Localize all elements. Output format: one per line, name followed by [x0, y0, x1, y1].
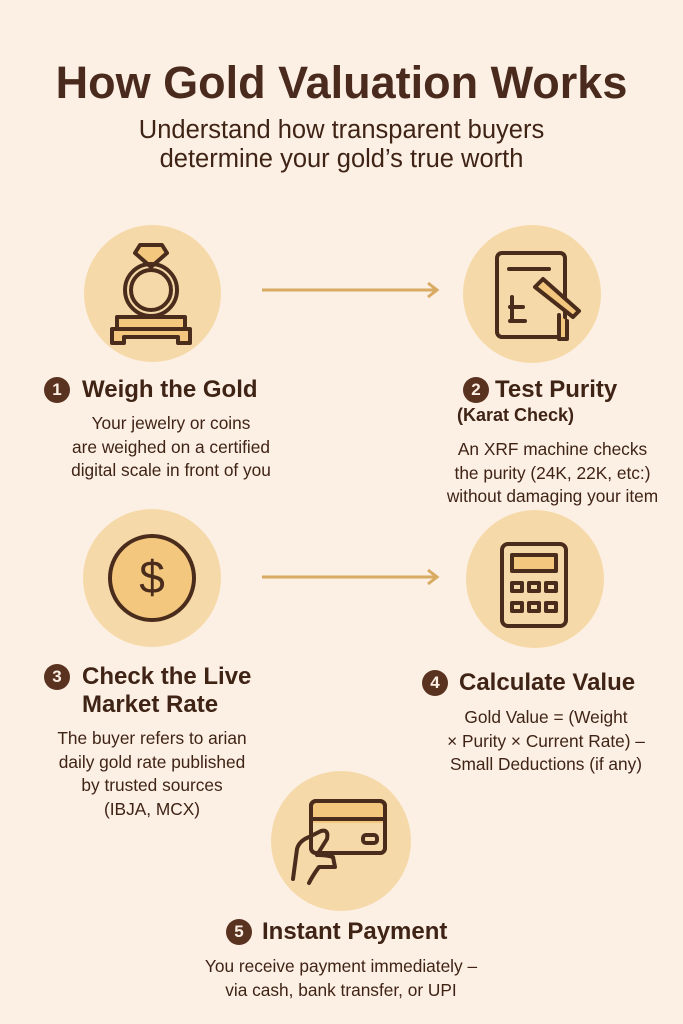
step 3 text: by trusted sources	[81, 775, 223, 795]
icon: ring on scale	[84, 225, 221, 362]
step 3 text: (IBJA, MCX)	[104, 798, 200, 818]
step 2 heading: Test Purity	[495, 376, 617, 403]
icon: dollar coin: $	[139, 551, 165, 603]
subtitle	[139, 116, 544, 173]
step 3 heading: Check the Live	[82, 663, 251, 690]
step 2 text: without damaging your item	[447, 486, 658, 506]
step 2 heading: (Karat Check)	[457, 405, 574, 425]
icon: card in hand	[271, 771, 411, 911]
step 3 heading: Market Rate	[82, 691, 218, 718]
step 1 text	[71, 413, 271, 480]
subtitle: determine your gold’s true worth	[160, 145, 523, 173]
step 2 text	[446, 439, 658, 506]
step 4 text: × Purity × Current Rate) –	[447, 730, 645, 750]
step 3 text: The buyer refers to arian	[57, 728, 247, 748]
step 1 text: Your jewelry or coins	[92, 413, 250, 433]
icon: dollar coin	[83, 509, 221, 647]
step 2 heading	[457, 376, 618, 425]
arrow 2	[262, 569, 440, 586]
step 2 text: An XRF machine checks	[458, 439, 647, 459]
step 4 text: Small Deductions (if any)	[450, 754, 642, 774]
step 4 heading: Calculate Value	[459, 669, 635, 696]
step 5 text: via cash, bank transfer, or UPI	[225, 980, 457, 1000]
step 4 heading: 4	[430, 673, 440, 692]
step 1 heading: Weigh the Gold	[82, 376, 258, 403]
step 1 heading: 1	[52, 380, 62, 399]
icon: calculator	[466, 510, 604, 648]
step 5 heading: Instant Payment	[262, 918, 447, 945]
title: How Gold Valuation Works	[56, 57, 627, 108]
step 2 heading: 2	[471, 380, 481, 399]
step 3 heading: 3	[52, 667, 62, 686]
step 1 text: digital scale in front of you	[71, 460, 271, 480]
icon: purity test	[463, 225, 601, 363]
step 5 heading: 5	[234, 922, 244, 941]
step 5 text: You receive payment immediately –	[205, 956, 477, 976]
step 3 heading	[44, 663, 251, 718]
step 3 text	[57, 728, 247, 818]
step 2 text: the purity (24K, 22K, etc:)	[455, 462, 650, 482]
arrow 1	[262, 282, 440, 298]
step 3 text: daily gold rate published	[59, 752, 245, 772]
subtitle: Understand how transparent buyers	[139, 116, 544, 144]
step 5 text	[205, 956, 478, 1000]
step 4 text: Gold Value = (Weight	[464, 707, 628, 727]
step 1 text: are weighed on a certified	[72, 436, 270, 456]
step 4 text	[447, 707, 645, 774]
